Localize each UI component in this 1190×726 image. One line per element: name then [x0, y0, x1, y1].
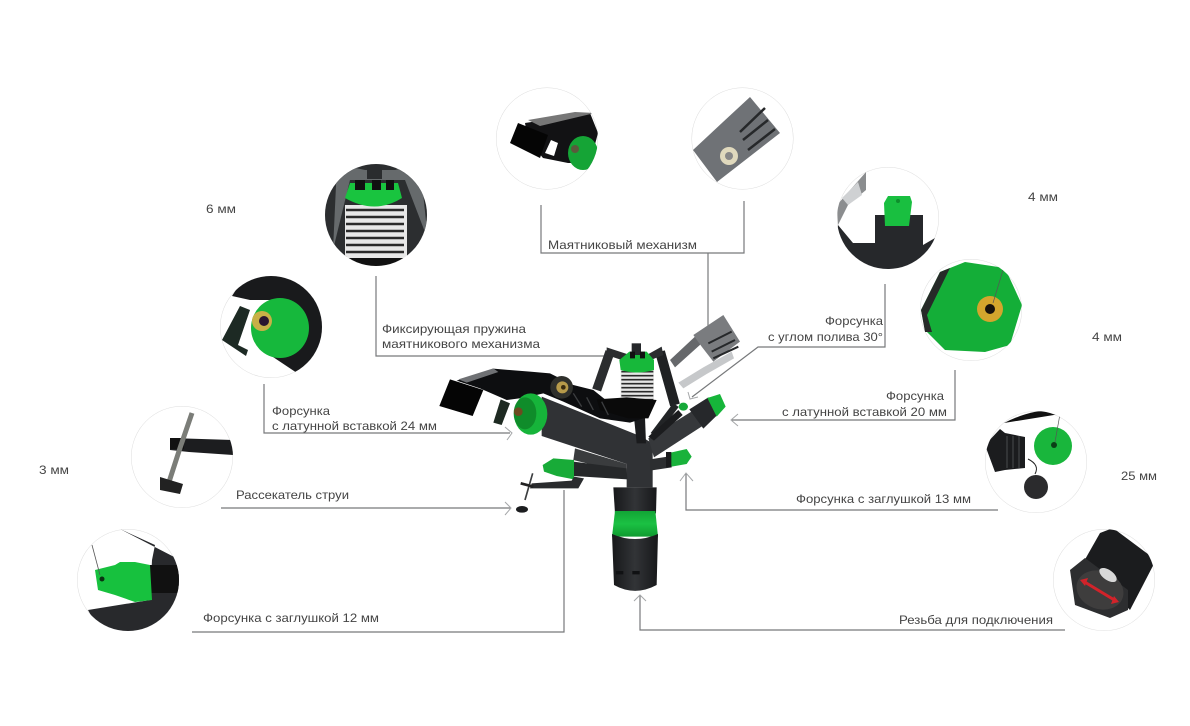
label: nozzle 20 mm: Форсунка — [886, 389, 944, 403]
panel: detail spring — [325, 164, 428, 267]
nozzle 24 mm — [514, 393, 547, 435]
leader lines — [192, 201, 1065, 632]
jet breaker — [516, 473, 584, 513]
dimension label: 4 mm (13 mm nozzle): 4 мм — [1092, 330, 1122, 344]
label: nozzle 30 degrees line 2: с углом полива 30° — [768, 330, 883, 344]
panel: detail nozzle 13 mm — [985, 411, 1087, 513]
panel: detail nozzle 24 mm — [220, 276, 323, 378]
panel: detail arm — [496, 88, 598, 190]
ghost pendulum handle — [670, 315, 740, 388]
arrow heads — [505, 392, 738, 601]
label: jet breaker: Рассекатель струи — [236, 488, 349, 502]
body tubes — [542, 397, 717, 487]
panel: detail nozzle 20 mm — [920, 259, 1022, 361]
label: nozzle 30 degrees: Форсунка — [825, 314, 883, 328]
panel: detail nozzle 30 degrees — [837, 167, 939, 269]
main sprinkler illustration — [439, 315, 740, 591]
dimension label: 25 mm: 25 мм — [1121, 469, 1157, 483]
label: nozzle 24 mm line 2: с латунной вставкой 24 мм — [272, 419, 437, 433]
connection collar — [612, 487, 658, 591]
panel: detail nozzle 12 mm — [77, 529, 180, 632]
panel: detail lever — [692, 88, 794, 190]
panel: detail thread — [1053, 528, 1156, 631]
dimension label: 3 mm: 3 мм — [39, 463, 69, 477]
label: nozzle 20 mm line 2: с латунной вставкой 20 мм — [782, 405, 947, 419]
impact arm — [439, 368, 657, 425]
label: connection thread: Резьба для подключения — [899, 613, 1053, 627]
label: pendulum mechanism: Маятниковый механизм — [548, 238, 697, 252]
nozzle 13 mm — [666, 449, 692, 467]
frame around spring — [597, 347, 676, 435]
panel: detail jet breaker — [131, 406, 233, 508]
small nozzle 30 degrees — [679, 403, 688, 411]
dimension label: 4 mm (20 mm nozzle): 4 мм — [1028, 190, 1058, 204]
nozzle 12 mm — [543, 458, 574, 479]
label: nozzle 12 mm: Форсунка с заглушкой 12 мм — [203, 611, 379, 625]
nozzle 20 mm — [707, 394, 726, 417]
label: fixing spring: Фиксирующая пружина — [382, 322, 526, 336]
dimension label: 6 mm: 6 мм — [206, 202, 236, 216]
label: nozzle 24 mm: Форсунка — [272, 404, 330, 418]
label: nozzle 13 mm: Форсунка с заглушкой 13 мм — [796, 492, 971, 506]
spring — [619, 343, 654, 402]
label: fixing spring line 2: маятникового механизма — [382, 337, 540, 351]
